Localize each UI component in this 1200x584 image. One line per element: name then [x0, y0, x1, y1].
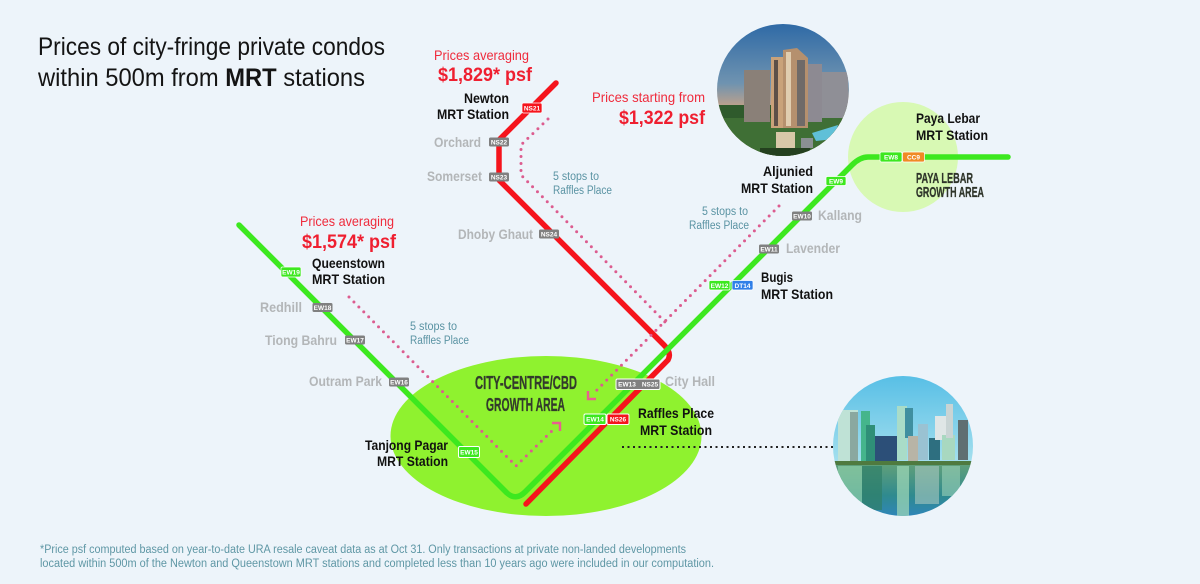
label: Aljunied MRT Station: MRT Station: [741, 180, 813, 196]
station code tags: EW18: [314, 305, 332, 312]
label: Tanjong Pagar MRT Station: Tanjong Pagar: [365, 437, 448, 453]
grey station names: Dhoby Ghaut: [458, 226, 533, 242]
callout: Aljunied price: $1,322 psf: [619, 108, 706, 129]
label: Bugis MRT Station: MRT Station: [761, 286, 833, 302]
station code tags: EW12: [711, 283, 729, 290]
station code tags: EW10: [793, 214, 811, 220]
label: Newton MRT Station: [437, 90, 509, 122]
station code tags: EW15: [460, 450, 478, 456]
grey station names: Orchard: [434, 134, 481, 150]
label: Queenstown MRT Station: MRT Station: [312, 271, 385, 287]
station code tags: EW13: [618, 382, 636, 388]
label: Raffles Place MRT Station: [638, 405, 714, 438]
callout: Newton price: [434, 47, 533, 86]
callout: Queenstown price: [300, 213, 397, 253]
note: stops from Queenstown: 5 stops to: [410, 321, 457, 333]
green MRT line: [239, 157, 1008, 497]
red MRT line: [499, 83, 669, 504]
note: stops from Queenstown: Raffles Place: [410, 335, 469, 347]
title: within 500m from MRT stations: [37, 64, 365, 92]
note: stops from Newton: 5 stops to: [553, 171, 599, 183]
note: stops from Aljunied: Raffles Place: [689, 220, 749, 232]
station code tags: NS25: [642, 382, 659, 388]
callout: Queenstown price: $1,574* psf: [302, 232, 397, 253]
growth area: Paya Lebar: [848, 102, 958, 212]
label: Aljunied MRT Station: Aljunied: [763, 163, 813, 179]
label: Queenstown MRT Station: Queenstown: [312, 255, 385, 271]
footnote: located within 500m of the Newton and Queenstown MRT stations and completed less than 10 years ago were included in our computation.: [40, 558, 714, 570]
label: Newton MRT Station: MRT Station: [437, 106, 509, 122]
photo: Aljunied condo: [717, 24, 849, 156]
heading: city-centre growth area: GROWTH AREA: [486, 395, 565, 415]
label: Raffles Place MRT Station: MRT Station: [640, 422, 712, 438]
label: Paya Lebar MRT Station: MRT Station: [916, 127, 988, 143]
grey station names: Redhill: [260, 299, 302, 315]
station code tags: NS24: [541, 232, 558, 238]
station code tags: DT14: [735, 283, 751, 290]
station code tags: EW9: [829, 178, 843, 186]
station code tags: EW11: [760, 246, 778, 254]
station code tags: NS22: [491, 140, 508, 146]
heading: Paya Lebar growth area: GROWTH AREA: [916, 184, 984, 201]
label: Aljunied MRT Station: [741, 163, 813, 196]
note: stops from Newton: Raffles Place: [553, 185, 612, 197]
heading: city-centre growth area: CITY-CENTRE/CBD: [475, 373, 577, 393]
growth area: city-centre/CBD: [390, 356, 702, 516]
label: Bugis MRT Station: Bugis: [761, 269, 793, 285]
callout: Aljunied price: Prices starting from: [592, 89, 705, 105]
station code tags: EW14: [586, 416, 604, 424]
label: Queenstown MRT Station: [312, 255, 385, 287]
note: stops from Newton: [553, 171, 612, 197]
callout: Newton price: $1,829* psf: [438, 65, 533, 86]
dotted route from Newton: [521, 119, 665, 322]
footnote: [40, 544, 714, 570]
station code tags: CC9: [907, 154, 920, 162]
grey station names: Lavender: [786, 240, 840, 256]
station code tags: NS26: [610, 416, 627, 424]
heading: Paya Lebar growth area: [916, 170, 984, 201]
station code tags: EW16: [390, 380, 408, 386]
title: Prices of city-fringe private condos: [38, 33, 385, 61]
label: Tanjong Pagar MRT Station: MRT Station: [377, 453, 448, 469]
note: stops from Aljunied: [689, 206, 749, 232]
station code tags: EW19: [282, 270, 300, 276]
label: Tanjong Pagar MRT Station: [365, 437, 448, 469]
note: stops from Aljunied: 5 stops to: [702, 206, 748, 218]
station code tags: NS21: [524, 106, 541, 112]
station code tags: EW8: [884, 154, 898, 162]
label: Paya Lebar MRT Station: Paya Lebar: [916, 110, 980, 126]
dotted route from Aljunied: [588, 206, 779, 399]
photo: CBD skyline: [833, 376, 973, 516]
grey station names: [260, 134, 862, 389]
grey station names: Outram Park: [309, 373, 382, 389]
heading: Paya Lebar growth area: PAYA LEBAR: [916, 170, 973, 187]
heading: city-centre growth area: [475, 373, 577, 415]
label: Newton MRT Station: Newton: [464, 90, 509, 106]
station code tags: NS23: [491, 174, 508, 182]
grey station names: Somerset: [427, 168, 482, 184]
grey station names: City Hall: [665, 373, 715, 389]
grey station names: Kallang: [818, 207, 862, 223]
title: [37, 33, 385, 92]
callout: Aljunied price: [592, 89, 706, 129]
dotted route from Queenstown: [349, 297, 560, 466]
station code tags: [281, 103, 924, 458]
footnote: *Price psf computed based on year-to-date URA resale caveat data as at Oct 31. Only transactions at private non-landed developments: [40, 544, 686, 556]
callout: Queenstown price: Prices averaging: [300, 213, 394, 229]
station code tags: EW17: [346, 338, 364, 344]
label: Bugis MRT Station: [761, 269, 833, 302]
note: stops from Queenstown: [410, 321, 469, 347]
grey station names: Tiong Bahru: [265, 332, 337, 348]
label: Raffles Place MRT Station: Raffles Place: [638, 405, 714, 421]
callout: Newton price: Prices averaging: [434, 47, 529, 63]
black dotted connector to skyline photo: [622, 446, 834, 448]
label: Paya Lebar MRT Station: [916, 110, 988, 143]
